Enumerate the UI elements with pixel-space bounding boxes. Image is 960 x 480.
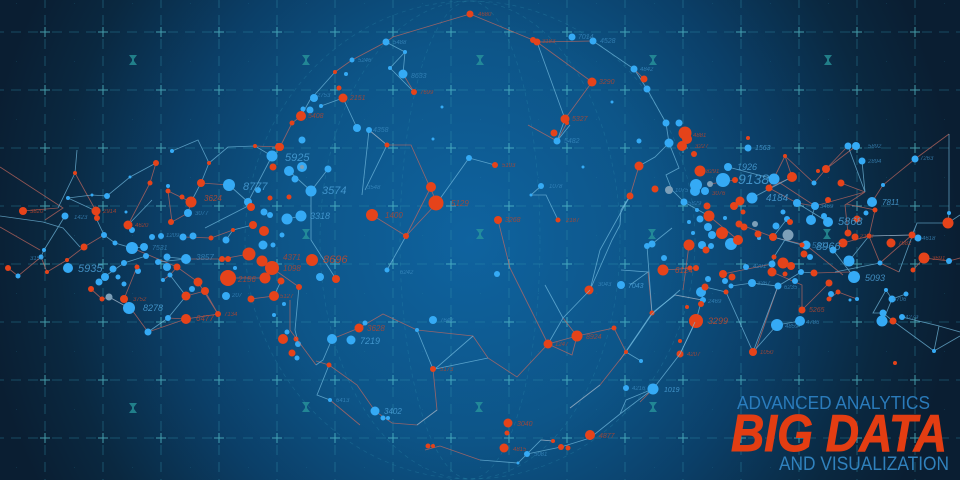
labels: centre — [367, 184, 612, 288]
labels: right cluster: 7811 — [882, 198, 899, 207]
nodes: right grey — [665, 181, 794, 240]
nodes: bottom blue — [327, 316, 658, 464]
network: bottom arc: 3628 — [367, 324, 385, 333]
network: right cluster: 3691 — [932, 256, 945, 262]
network: bottom arc: 5173 — [440, 367, 454, 373]
labels: right cluster — [628, 145, 899, 290]
labels: upper arc: 8633 — [411, 73, 427, 80]
network: left cluster: 6477 — [196, 314, 214, 323]
network: right cluster: 4291 — [753, 264, 766, 270]
network: left cluster: 2156 — [237, 275, 256, 284]
nodes: centre — [366, 182, 594, 294]
network: bottom arc: 3040 — [517, 421, 533, 428]
labels: centre: 6242 — [400, 270, 414, 276]
heading: and visualization: AND VISUALIZATION — [779, 454, 949, 475]
network: bottom arc: 5081 — [534, 452, 547, 458]
network: centre — [366, 182, 630, 344]
network: upper arc: 2151 — [349, 95, 366, 102]
nodes: left grey — [106, 165, 304, 300]
network: right cluster: 4881 — [693, 133, 706, 139]
network: right cluster: 3076 — [712, 191, 726, 197]
network: left cluster: 3857 — [196, 253, 214, 262]
network: bottom arc: 1247 — [555, 342, 569, 348]
network: bottom arc: 4815 — [513, 447, 527, 453]
labels: bottom arc: 1019 — [664, 387, 680, 394]
labels: right cluster: 1926 — [737, 162, 757, 172]
labels: left cluster: 8278 — [143, 303, 163, 313]
network: right cluster: 4207 — [687, 352, 701, 358]
network: right cluster: 5706 — [893, 297, 907, 303]
network: right cluster: 3227 — [695, 144, 709, 150]
network: right cluster — [617, 120, 960, 365]
network: left cluster: 7531 — [152, 245, 168, 252]
network: left cluster: 5127 — [280, 294, 294, 300]
icons: hourglass markers — [129, 55, 832, 413]
labels: upper arc: 4842 — [640, 67, 654, 73]
network: bottom arc — [290, 285, 695, 464]
network: left cluster: 207 — [231, 293, 243, 299]
network: right cluster: 7582 — [898, 241, 912, 247]
network: left cluster: 1423 — [74, 215, 88, 221]
network: right cluster: 5311 — [812, 241, 829, 250]
nodes: bottom red — [326, 324, 628, 452]
labels: left cluster — [78, 152, 346, 313]
network: bottom arc: 4877 — [599, 433, 616, 440]
network: upper arc: 5103 — [502, 163, 516, 169]
network: right cluster: 5265 — [809, 307, 825, 314]
labels: left cluster: 3318 — [310, 211, 330, 221]
labels: right cluster: 4184 — [766, 193, 789, 204]
network: right cluster: 6235 — [784, 285, 798, 291]
labels: centre: 3548 — [367, 185, 381, 191]
nodes: left red — [5, 143, 340, 356]
network: bottom arc: 8924 — [586, 334, 602, 341]
network: left cluster: 3077 — [195, 211, 209, 217]
network: right cluster: 4859 — [785, 324, 799, 330]
network: left cluster: 4371 — [283, 253, 301, 262]
labels: left cluster: 8777 — [243, 181, 268, 193]
nodes: upper arc red — [276, 10, 648, 168]
network: right cluster: 7263 — [920, 156, 934, 162]
labels: centre: 3043 — [598, 282, 612, 288]
network: bottom arc: 4216 — [632, 386, 646, 392]
network: centre: 5129 — [451, 199, 469, 208]
network: right cluster: 3367 — [757, 281, 771, 287]
labels: upper arc: 4528 — [600, 38, 616, 45]
network: left cluster: 3752 — [133, 297, 147, 303]
labels: upper arc: 5246 — [358, 58, 372, 64]
network: upper arc: 3183 — [542, 39, 556, 45]
labels: bottom arc: 3402 — [384, 407, 402, 416]
network: bottom arc: 7642 — [440, 318, 454, 324]
network: right cluster: 1075 — [675, 188, 689, 194]
network: left cluster: 1209 — [166, 233, 180, 239]
labels: right cluster: 9138 — [738, 171, 769, 187]
network: upper arc: 7699 — [420, 90, 434, 96]
network: right cluster: 5892 — [868, 144, 882, 150]
network: bottom arc: 6413 — [336, 398, 350, 404]
network: centre: 3268 — [505, 217, 521, 224]
network: right cluster: 4786 — [806, 320, 820, 326]
labels: right cluster: 8966 — [816, 241, 841, 253]
title block — [731, 393, 949, 475]
labels: right cluster: 5868 — [838, 216, 863, 228]
network: right cluster: 1050 — [760, 350, 774, 356]
network: upper arc: 5327 — [572, 116, 589, 123]
network: right cluster: 8291 — [706, 169, 719, 175]
network: upper arc — [276, 10, 666, 203]
labels: bottom arc — [360, 336, 680, 416]
network: centre: 1400 — [385, 211, 403, 220]
network: left cluster: 3820 — [30, 209, 44, 215]
network: left cluster: 1098 — [283, 264, 301, 273]
labels: right cluster: 7043 — [628, 283, 644, 290]
network: left cluster: 3624 — [204, 194, 222, 203]
network: left cluster: 4620 — [135, 223, 149, 229]
network: upper arc: 5408 — [308, 113, 324, 120]
labels: left cluster: 5925 — [285, 152, 310, 164]
labels: left cluster: 5935 — [78, 263, 103, 275]
labels: upper arc: 4358 — [373, 127, 389, 134]
network: left cluster: 8696 — [323, 254, 348, 266]
labels: upper arc: 5488 — [393, 40, 407, 46]
network: right cluster: 3299 — [708, 316, 728, 326]
nodes: upper arc blue — [298, 34, 650, 168]
labels: upper arc — [316, 34, 654, 145]
labels: centre: 1078 — [549, 184, 563, 190]
network: right cluster: 6124 — [675, 266, 693, 275]
network: upper arc: 3290 — [599, 79, 615, 86]
labels: right cluster: 1563 — [755, 145, 771, 152]
labels: upper arc: 7014 — [578, 34, 594, 41]
network: upper arc: 4680 — [478, 12, 492, 18]
nodes: right red — [626, 126, 954, 365]
labels: right cluster: 5093 — [865, 273, 885, 283]
network: left cluster — [0, 140, 348, 360]
labels: upper arc: 5482 — [564, 138, 580, 145]
network: right cluster: 4279 — [905, 315, 919, 321]
network: right cluster: 2469 — [707, 299, 722, 305]
labels: bottom arc: 7219 — [360, 336, 380, 346]
network: right cluster: 2894 — [867, 159, 882, 165]
network: left cluster: 3154 — [30, 256, 44, 262]
network: right cluster: 2158 — [859, 234, 874, 240]
nodes: right blue — [617, 120, 952, 353]
heading: advanced analytics: ADVANCED ANALYTICS — [737, 393, 930, 413]
network: centre: 2187 — [565, 218, 580, 224]
labels: left cluster: 3574 — [322, 185, 346, 197]
network: right cluster: 4618 — [922, 236, 936, 242]
network: right cluster: 5829 — [688, 201, 702, 207]
dashed globe meridians — [245, 1, 695, 479]
labels: upper arc: 2753 — [316, 93, 331, 99]
network: left cluster: 7134 — [224, 312, 238, 318]
network: right cluster: 3469 — [820, 204, 834, 210]
network: left cluster: 2914 — [102, 209, 117, 215]
nodes: left blue — [16, 149, 332, 360]
